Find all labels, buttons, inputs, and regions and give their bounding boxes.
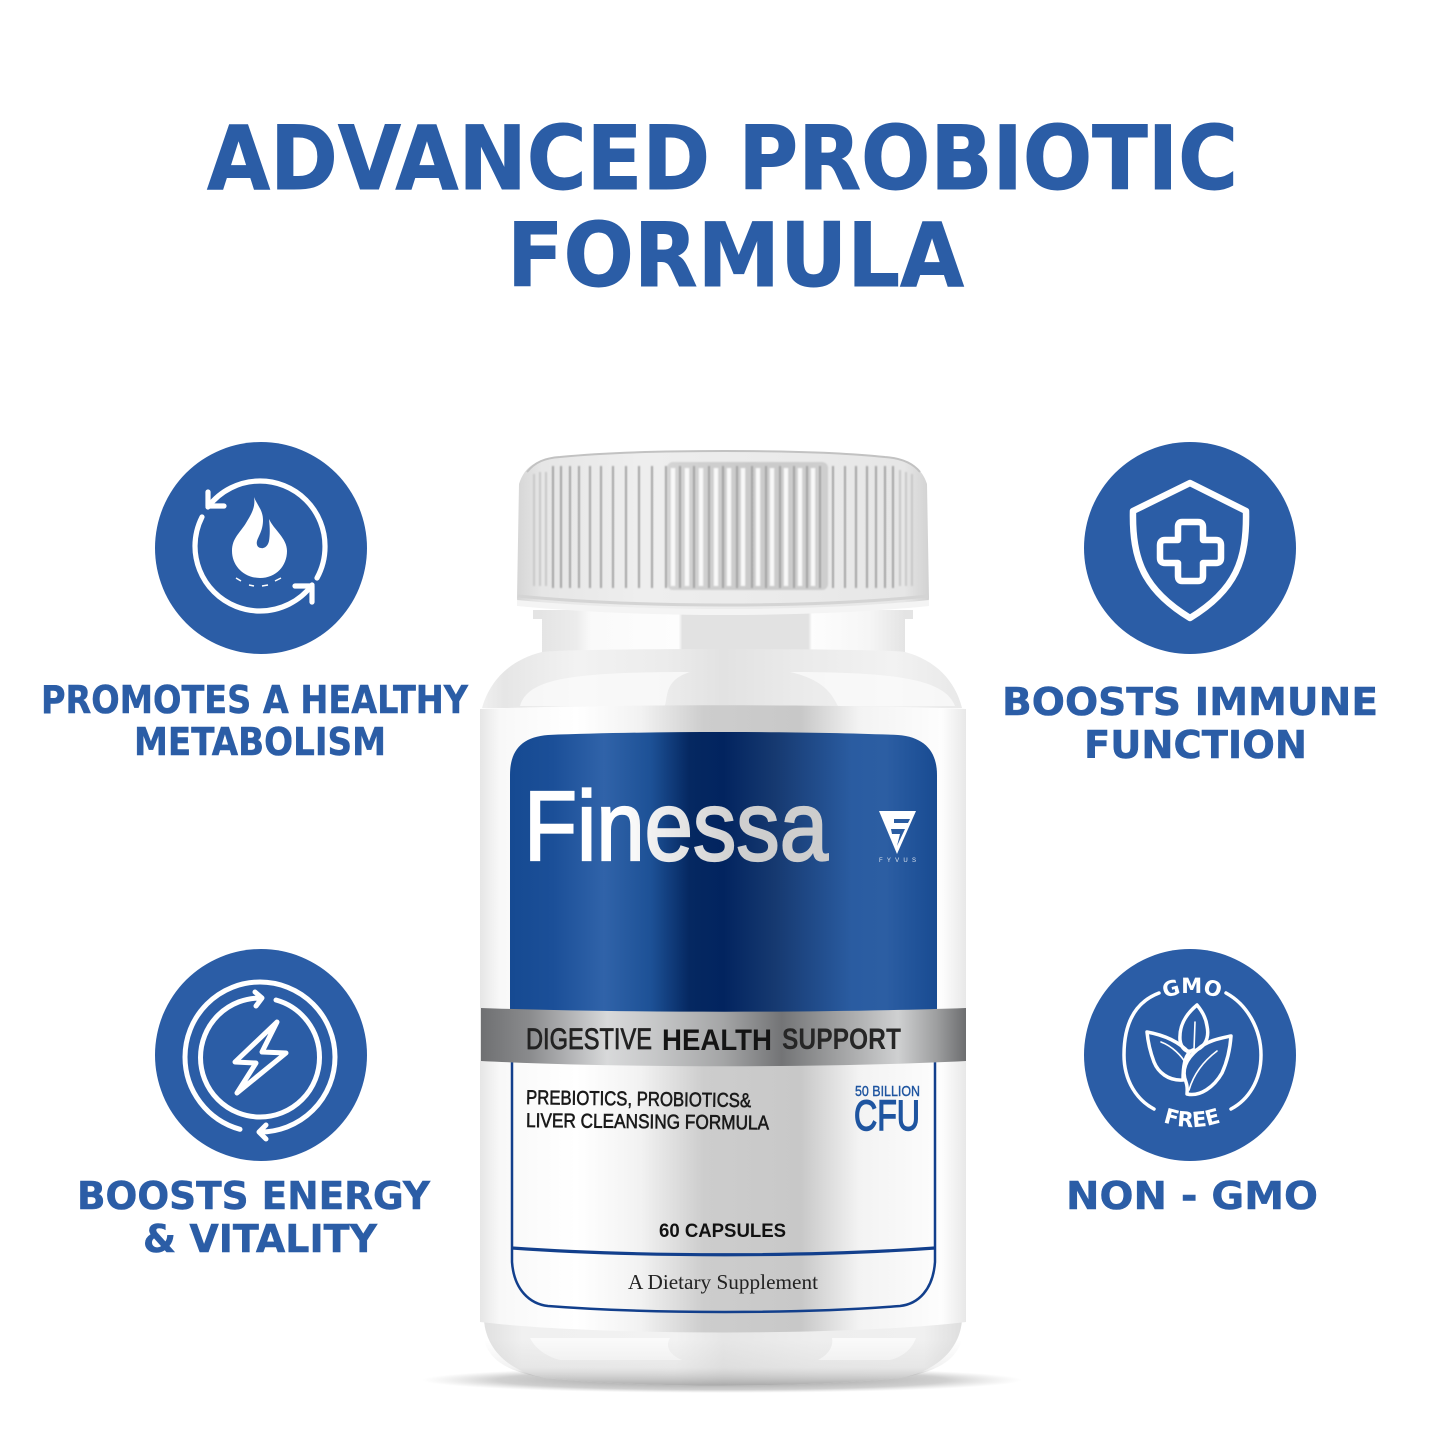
panel: boosts immune function xyxy=(1002,442,1378,767)
formula description xyxy=(526,1087,770,1135)
band text: digestive health support: DIGESTIVE xyxy=(526,1023,652,1056)
bottle neck xyxy=(533,610,913,655)
bottle xyxy=(422,451,1022,1393)
panel: non-gmo xyxy=(1066,949,1318,1218)
brand name: Finessa xyxy=(524,771,828,881)
formula description: PREBIOTICS, PROBIOTICS& xyxy=(526,1087,752,1112)
capsule count: 60 CAPSULES xyxy=(659,1221,786,1242)
band text: digestive health support xyxy=(526,1023,901,1057)
bottle shadow xyxy=(422,1367,1022,1393)
label: promotes a healthy metabolism xyxy=(41,678,468,764)
formula description: LIVER CLEANSING FORMULA xyxy=(526,1110,770,1135)
icon: gmo free leaves xyxy=(1084,949,1296,1161)
panel: boosts energy and vitality xyxy=(77,949,430,1261)
bottle shoulder xyxy=(482,649,962,708)
label: boosts immune function: BOOSTS IMMUNE xyxy=(1002,680,1378,724)
icon: lightning in cycle xyxy=(155,949,367,1161)
label: blue outline lower panel xyxy=(512,1062,935,1312)
cfu badge: CFU xyxy=(854,1092,920,1140)
icon: gmo free leaves: GMO xyxy=(1163,978,1221,996)
label: blue panel xyxy=(510,732,937,1014)
band text: digestive health support: HEALTH xyxy=(662,1024,772,1057)
bottle base xyxy=(484,1320,962,1386)
panel: promotes a healthy metabolism xyxy=(41,442,468,764)
cfu badge: 50 BILLION xyxy=(855,1083,920,1100)
label: promotes a healthy metabolism: PROMOTES A HEALTHY xyxy=(41,678,468,722)
label: promotes a healthy metabolism: METABOLISM xyxy=(134,720,386,764)
brand logo xyxy=(879,811,916,864)
band text: digestive health support: SUPPORT xyxy=(782,1023,901,1056)
silver band xyxy=(481,1008,966,1066)
dietary supplement note: A Dietary Supplement xyxy=(628,1270,818,1294)
label: boosts energy and vitality xyxy=(77,1174,430,1261)
title: ADVANCED PROBIOTIC xyxy=(207,107,1238,210)
icon: flame in cycle xyxy=(155,442,367,654)
cfu badge xyxy=(854,1083,920,1140)
title xyxy=(207,107,1238,307)
title: FORMULA xyxy=(507,204,964,307)
label: non-gmo: NON - GMO xyxy=(1066,1174,1318,1218)
bottle body xyxy=(480,705,966,1332)
label: boosts energy and vitality: BOOSTS ENERGY xyxy=(77,1174,430,1218)
brand logo: FYVUS xyxy=(879,858,916,864)
label: boosts immune function xyxy=(1002,680,1378,767)
label: boosts energy and vitality: & VITALITY xyxy=(143,1217,377,1261)
icon: shield with cross xyxy=(1084,442,1296,654)
icon: gmo free leaves: FREE xyxy=(1164,1108,1220,1128)
cap xyxy=(517,451,929,615)
label: boosts immune function: FUNCTION xyxy=(1084,723,1307,767)
